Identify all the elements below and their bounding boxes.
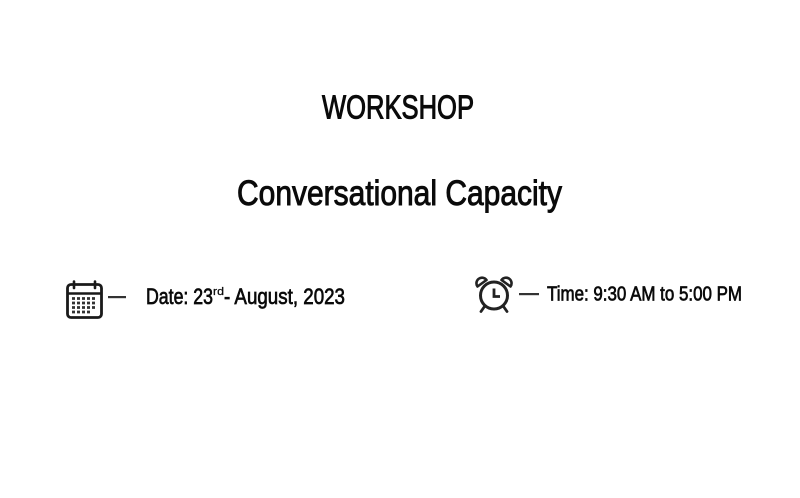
- text: date: rd: [213, 286, 224, 298]
- dash: date: [108, 296, 126, 298]
- text: date: Date: 23: [146, 284, 213, 309]
- title: conversational capacity: Conversational Capacity: [237, 174, 562, 213]
- text: date: [146, 284, 345, 309]
- icon: calendar: [68, 282, 102, 318]
- heading: workshop: WORKSHOP: [322, 88, 474, 126]
- text: time: Time: 9:30 AM to 5:00 PM: [547, 284, 742, 306]
- icon: alarm clock: [476, 278, 512, 312]
- dash: time: [519, 293, 539, 295]
- text: date: - August, 2023: [224, 284, 345, 309]
